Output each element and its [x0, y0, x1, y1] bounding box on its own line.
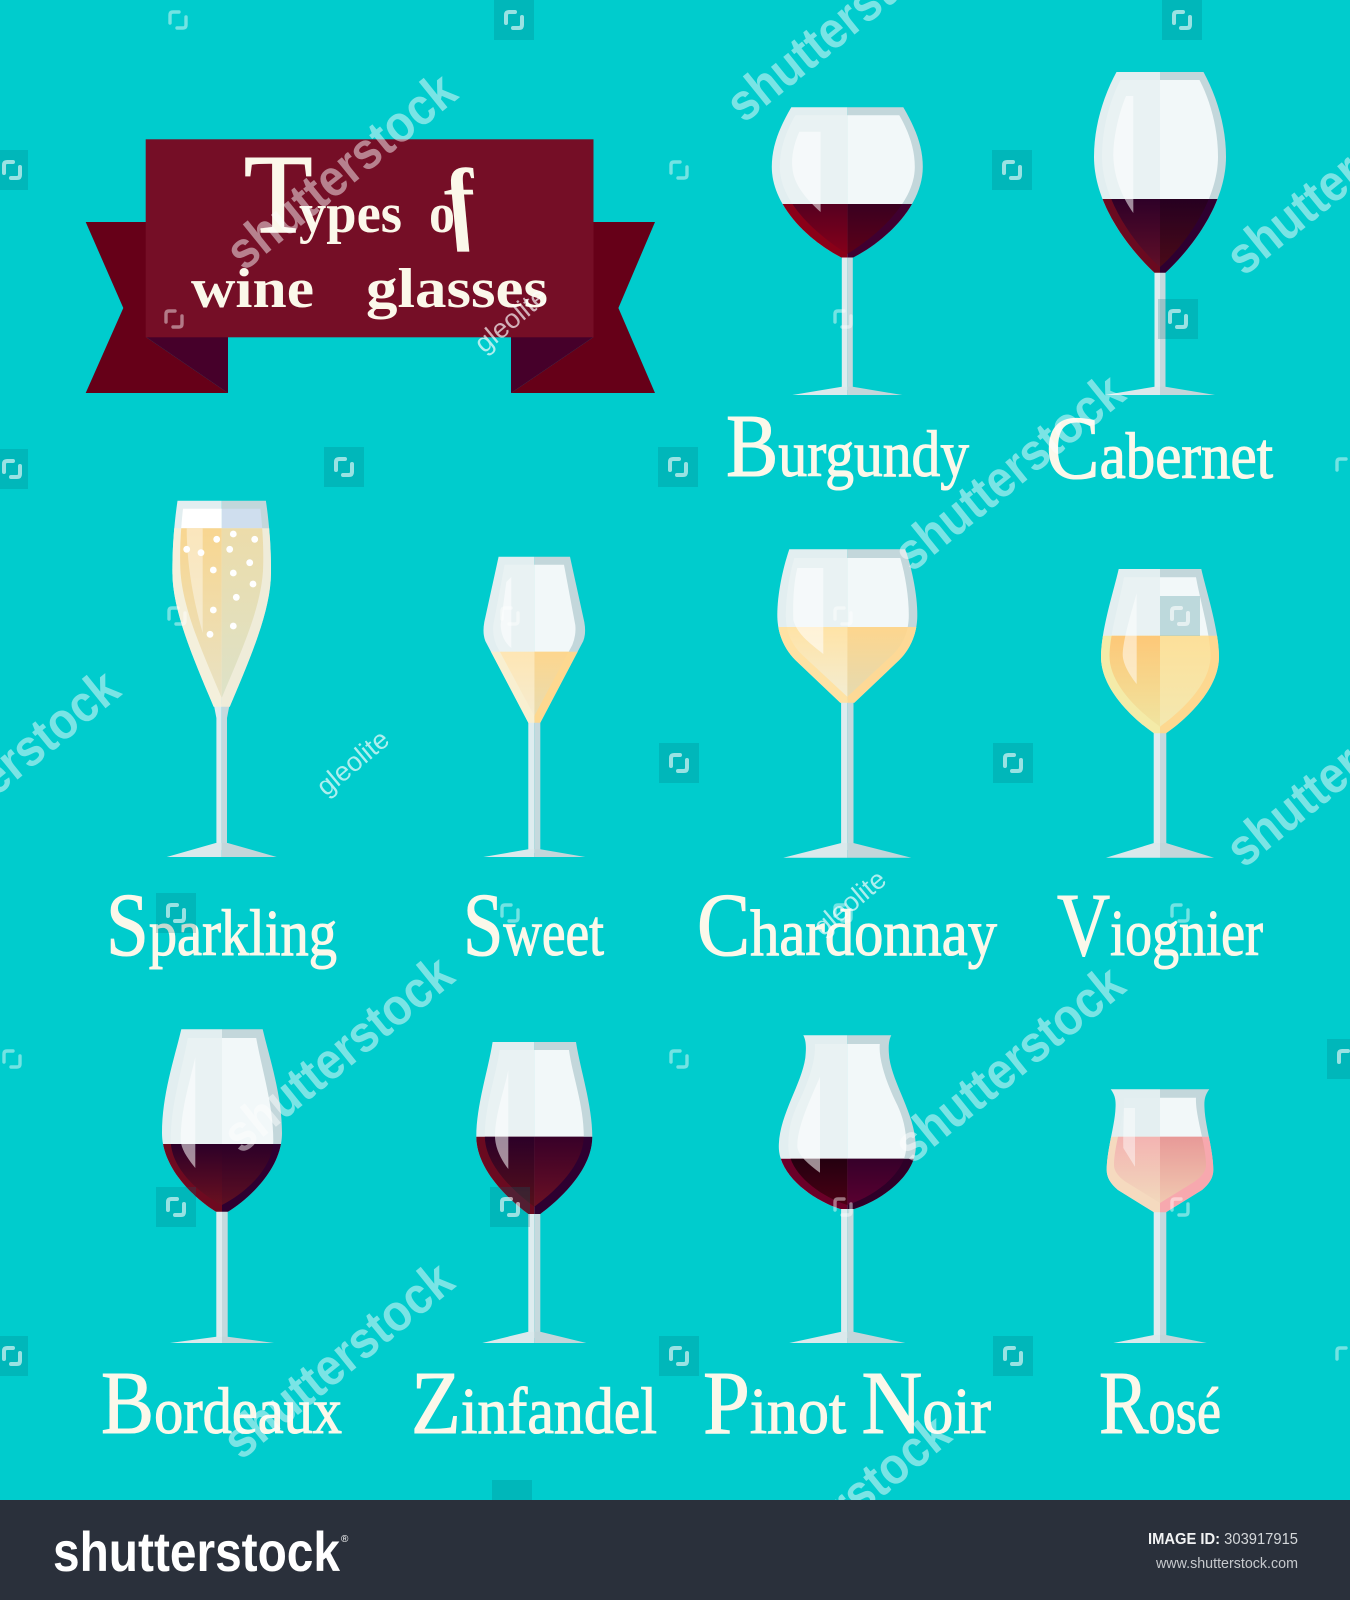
- watermarks: shutterstock: [212, 944, 465, 1164]
- title line 1: ypes: [299, 183, 402, 245]
- title line 2: [191, 258, 548, 320]
- watermarks: shutterstock: [215, 61, 468, 281]
- glass: Rosé: [1107, 1089, 1213, 1343]
- glass: Bordeaux: [162, 1029, 282, 1343]
- glass: Cabernet: [1094, 72, 1226, 395]
- watermarks: gleolite: [469, 281, 553, 359]
- title line 1: [244, 133, 496, 257]
- glass: Sparkling: [167, 501, 277, 857]
- glass: Sweet: [483, 557, 585, 857]
- footer logo: shutterstock: [53, 1520, 341, 1583]
- footer url: www.shutterstock.com: [1155, 1555, 1298, 1572]
- watermarks: gleolite: [311, 724, 395, 802]
- label: Sweet: Sweet: [463, 876, 604, 975]
- title line 1: T: [244, 133, 312, 257]
- glass: Viognier: [1101, 569, 1219, 858]
- title line 1: o: [429, 183, 455, 245]
- glass: Burgundy: [772, 107, 923, 395]
- watermarks: shutterstock: [883, 362, 1136, 582]
- glass: Zinfandel: [476, 1042, 592, 1343]
- label: Burgundy: Burgundy: [726, 397, 969, 496]
- footer registered mark: ®: [341, 1534, 349, 1545]
- label: Cabernet: Cabernet: [1046, 399, 1273, 498]
- glass: Chardonnay: [777, 549, 917, 858]
- watermarks: shutterstock: [883, 954, 1136, 1174]
- footer bar: [0, 1500, 1350, 1600]
- label: Pinot Noir: Pinot Noir: [703, 1354, 991, 1453]
- footer image id: IMAGE ID: 303917915: [1148, 1531, 1298, 1548]
- ribbon banner with title: [86, 133, 655, 393]
- ribbon left fold: [146, 337, 228, 393]
- bubbles: [183, 531, 258, 638]
- watermarks: shutterstock: [212, 1250, 465, 1470]
- label: Viognier: Viognier: [1057, 876, 1263, 975]
- title line 1: f: [430, 151, 496, 253]
- watermarks: gleolite: [808, 864, 892, 942]
- ribbon main panel: [146, 139, 593, 337]
- ribbon right tail: [511, 222, 655, 393]
- label: Sparkling: Sparkling: [106, 876, 337, 975]
- label: Zinfandel: Zinfandel: [411, 1354, 657, 1453]
- title line 2: glasses: [366, 258, 548, 320]
- label: Chardonnay: Chardonnay: [697, 876, 997, 975]
- ribbon left tail: [86, 222, 228, 393]
- label: Rosé: Rosé: [1099, 1354, 1221, 1453]
- glass: Pinot Noir: [779, 1035, 916, 1343]
- ribbon right fold: [511, 337, 594, 393]
- label: Bordeaux: Bordeaux: [101, 1354, 342, 1453]
- title line 2: wine: [191, 258, 314, 320]
